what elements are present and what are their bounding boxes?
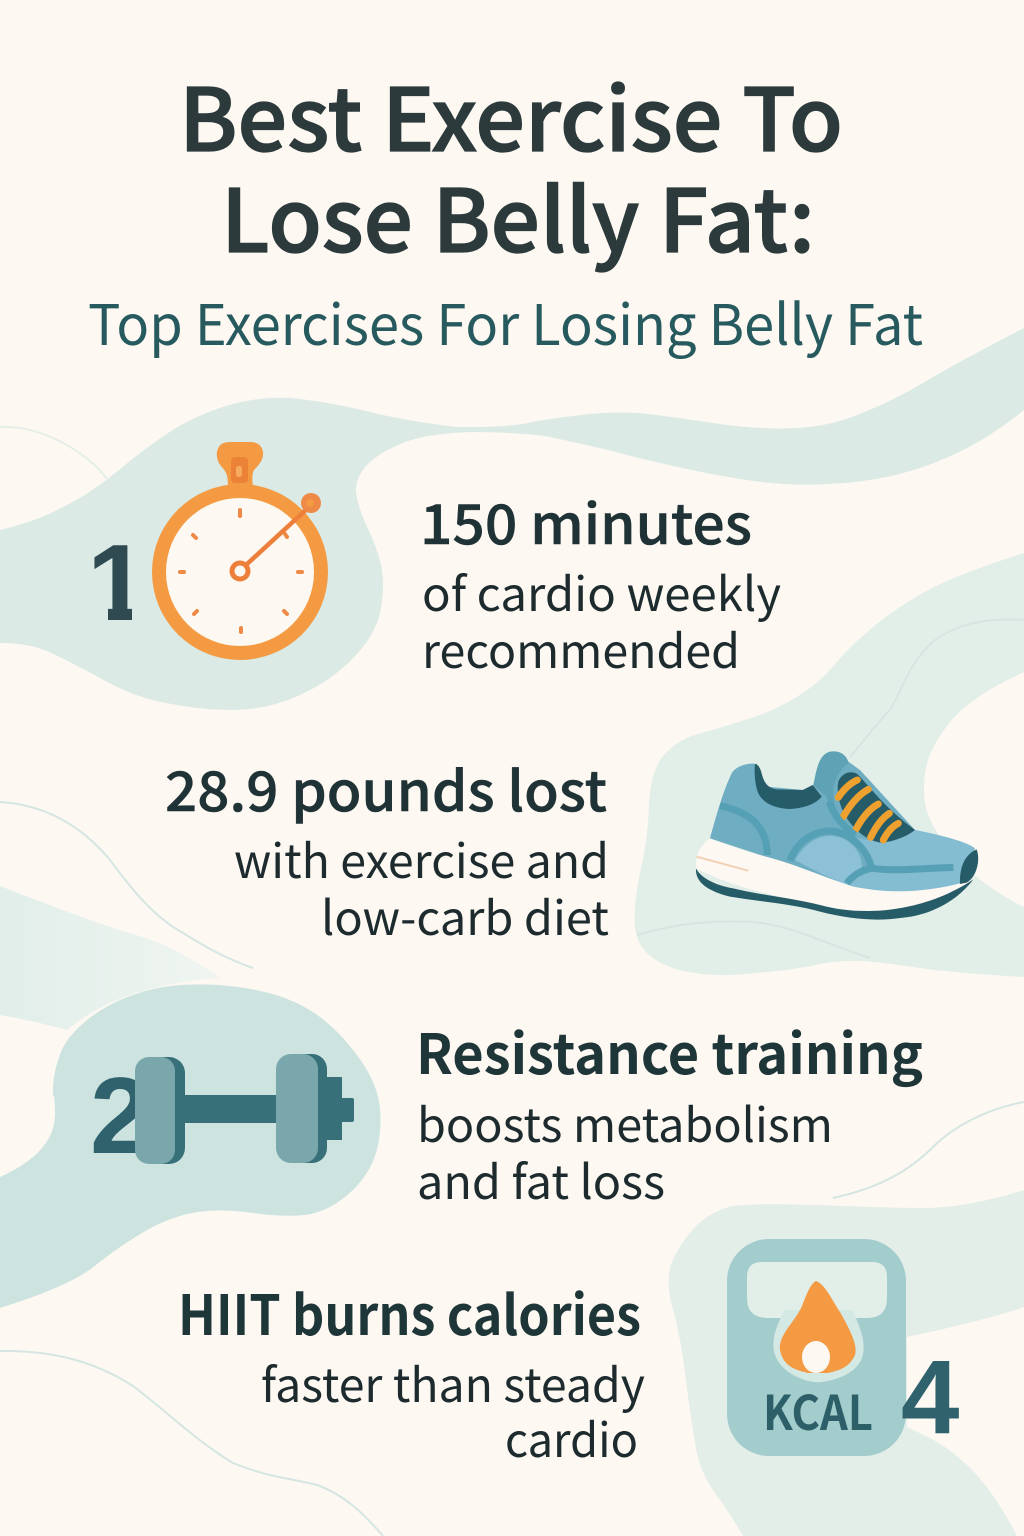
background thin lines — [0, 427, 1024, 1536]
text: HIIT burns calories — [178, 1271, 645, 1471]
text: Resistance training: and fat loss — [417, 1144, 665, 1213]
background wave: dumbbell blob — [0, 984, 380, 1308]
text: 28.9 pounds lost — [165, 747, 609, 949]
title — [179, 51, 843, 278]
text: Resistance training — [416, 1010, 923, 1213]
background wave: shoe blob — [635, 553, 1024, 977]
text: Resistance training: Resistance training — [416, 1010, 923, 1090]
background wave: kcal blob — [668, 1190, 1024, 1536]
icon: kettlebell with flame — [727, 1239, 906, 1456]
text: HIIT burns calories: HIIT burns calories — [178, 1271, 641, 1351]
text: 150 minutes: of cardio weekly — [422, 556, 781, 625]
background wave: pale left band — [0, 886, 220, 1030]
subtitle: Top Exercises For Losing Belly Fat — [88, 281, 923, 362]
text: Resistance training: boosts metabolism — [417, 1087, 833, 1156]
text: 150 minutes — [420, 480, 781, 682]
icon: stopwatch — [152, 442, 328, 660]
background wave: top band and stopwatch blob — [0, 328, 1024, 710]
text: 150 minutes: 150 minutes — [420, 480, 752, 560]
number 2: 2 — [90, 1055, 151, 1177]
title: Lose Belly Fat: — [221, 152, 815, 278]
number 4: 4 — [901, 1339, 959, 1456]
icon: running shoe — [696, 751, 978, 920]
title: Best Exercise To — [179, 51, 843, 177]
icon: dumbbell — [135, 1054, 354, 1164]
icon: kettlebell with flame: KCAL — [763, 1374, 873, 1444]
text: HIIT burns calories: cardio — [505, 1402, 638, 1471]
text: 28.9 pounds lost: low-carb diet — [321, 880, 609, 949]
text: 28.9 pounds lost: with exercise and — [234, 823, 609, 892]
number 1: 1 — [87, 522, 148, 644]
text: 28.9 pounds lost: 28.9 pounds lost — [165, 747, 607, 827]
text: 150 minutes: recommended — [422, 613, 740, 682]
text: HIIT burns calories: faster than steady — [261, 1347, 645, 1416]
